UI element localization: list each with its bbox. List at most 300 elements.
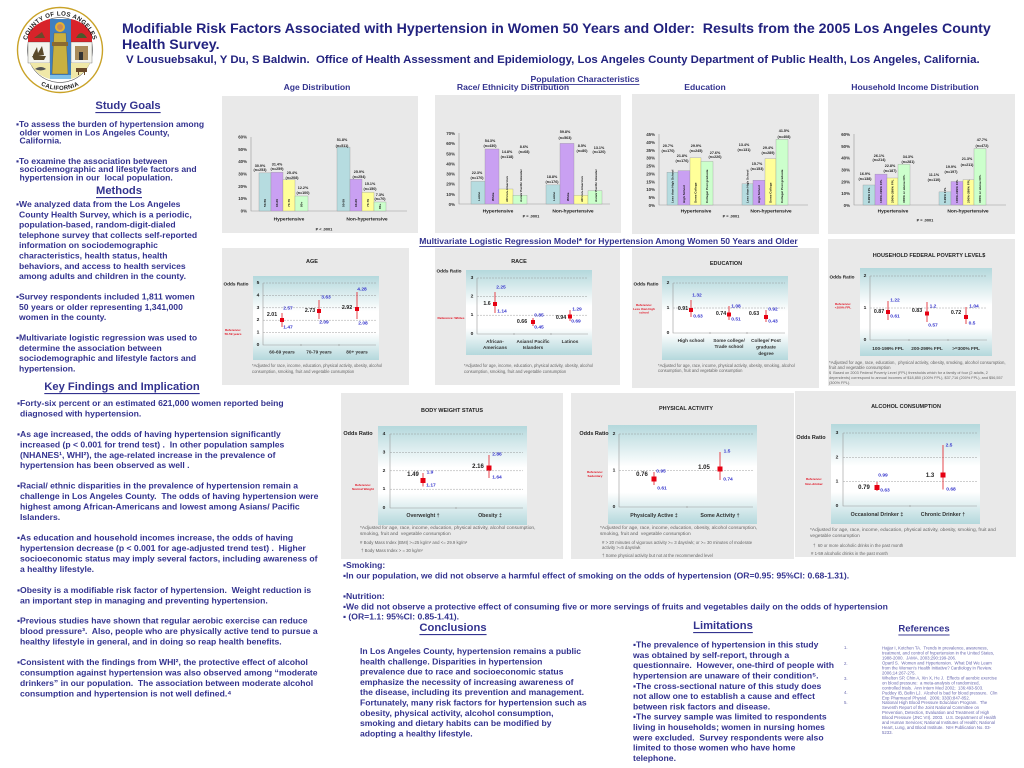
icon: county seal: CALIFORNIA	[42, 82, 79, 90]
panel: odds ratio by body weight: BODY WEIGHT STATUS	[421, 408, 483, 414]
panel: odds ratio by poverty level: Odds Ratio	[829, 274, 855, 280]
panel: education bar chart: (n=408)	[777, 135, 791, 139]
limitations text: limited to those women who have home	[633, 743, 796, 753]
panel: age distribution bar chart: 60-69	[275, 199, 279, 207]
key findings text: consumption against hypertension was also observed among “moderate	[20, 668, 318, 678]
panel: education bar chart: 27.6%	[710, 151, 721, 155]
references list: Seventh Report of the Joint National Committee on	[882, 705, 980, 710]
panel: odds ratio by education: 0.91	[678, 306, 688, 312]
panel: odds ratio by race: Odds Ratio	[436, 268, 462, 274]
panel: education bar chart: College/ Post graduate	[780, 169, 784, 203]
panel: education bar chart: (n=245)	[689, 149, 703, 153]
panel: odds ratio by body weight: Odds Ratio	[343, 431, 373, 437]
panel: education bar chart: 41.5%	[779, 129, 790, 133]
conclusions text: obesity, physical activity, alcohol consumption,	[360, 708, 554, 718]
heading: income distribution: Household Income Distribution	[851, 82, 979, 92]
panel: odds ratio by physical activity: Some Activity †	[700, 513, 740, 519]
panel: odds ratio by poverty level: Reference:	[835, 302, 851, 306]
panel: odds ratio by education: degree	[758, 350, 774, 356]
panel: odds ratio by alcohol consumption: 0.63	[880, 488, 890, 494]
panel: odds ratio by body weight: Reference:	[355, 483, 371, 487]
panel: education bar chart: 40%	[646, 139, 655, 144]
panel: age distribution bar chart: 70-79	[366, 199, 370, 207]
panel: education bar chart: 15.7%	[752, 162, 763, 166]
panel: odds ratio by age: 0	[257, 342, 260, 348]
panel: odds ratio by race	[435, 248, 620, 385]
panel: race distribution bar chart: Latino	[552, 192, 556, 201]
panel: odds ratio by physical activity: PHYSICAL ACTIVITY	[659, 406, 713, 412]
panel: race distribution bar chart: African-American	[580, 176, 584, 202]
panel: odds ratio by race: 0.85	[534, 312, 544, 318]
panel: odds ratio by alcohol consumption: ALCOHOL CONSUMPTION	[871, 404, 941, 410]
panel: odds ratio by body weight: 4	[383, 430, 386, 436]
references list: Prevention, Detection, Evaluation and Treatment of High	[882, 710, 990, 714]
references list: Hajjar I, Kotchen TA. Trends in prevalence, awareness,	[882, 645, 988, 650]
panel: odds ratio by poverty level: dependents) correspond to annual incomes of $18,850 (100% FPL), $37,716 (200% FPL), and $56,557	[829, 376, 1003, 380]
panel: odds ratio by race: 1.14	[497, 308, 507, 314]
panel: odds ratio by age: consumption, smoking, fruit and vegetable consumption	[252, 368, 355, 374]
panel: odds ratio by alcohol consumption: 1	[836, 478, 839, 484]
panel: odds ratio by poverty level: 200-299% FPL	[911, 346, 943, 350]
panel: education bar chart: 15%	[646, 179, 655, 184]
panel: odds ratio by poverty level: 0.87	[874, 309, 884, 315]
key findings text: ▪Forty-six percent or an estimated 621,000 women reported being	[17, 398, 284, 408]
key findings text: ▪Obesity is a modifiable risk factor of hypertension. Weight reduction is	[17, 585, 311, 595]
panel: education bar chart: Hypertensive	[681, 208, 712, 214]
panel: age distribution bar chart: P < .0001	[316, 226, 333, 232]
panel: household income bar chart: (n=110)	[928, 178, 941, 182]
panel: odds ratio by physical activity: 0.74	[723, 476, 733, 482]
references list: and Human Services; National Institutes of Health; National	[882, 720, 995, 724]
key findings text: increased (p < 0.001 for trend test) . In other population samples	[20, 440, 285, 450]
panel: odds ratio by body weight: 1	[383, 486, 386, 492]
references list: 2.	[844, 660, 848, 666]
panel: race distribution bar chart	[435, 95, 621, 233]
panel: race distribution bar chart: 50%	[446, 151, 455, 156]
panel: odds ratio by age: 1.47	[283, 324, 293, 330]
methods text: telephone survey that collects self-reported	[19, 230, 197, 240]
panel: odds ratio by education: Less than high	[633, 307, 655, 311]
panel: age distribution bar chart: (n=208)	[285, 176, 299, 180]
panel: age distribution bar chart: 30%	[238, 172, 247, 176]
methods text: behaviors, and access to health services	[19, 261, 186, 271]
panel: race distribution bar chart: 54.3%	[485, 139, 496, 143]
panel: household income bar chart: 50%	[841, 143, 850, 148]
panel: odds ratio by body weight: Obesity ‡	[478, 513, 502, 519]
study goals text: ▪To assess the burden of hypertension among	[16, 119, 204, 129]
panel: odds ratio by education: High school	[678, 338, 704, 342]
panel: odds ratio by physical activity: 0.95	[656, 468, 666, 474]
panel: race distribution bar chart: 8.5%	[578, 144, 587, 148]
panel: education bar chart: 45%	[646, 132, 655, 136]
panel: odds ratio by education: 0.43	[768, 318, 778, 324]
panel: odds ratio by age: 2.57	[283, 306, 293, 312]
panel: race distribution bar chart: 22.3%	[472, 171, 483, 175]
panel: odds ratio by body weight: 1.9	[427, 470, 434, 476]
panel: race distribution bar chart: (n=68)	[519, 150, 530, 154]
limitations text: not allow one to establish a cause and effect	[633, 691, 815, 701]
panel: age distribution bar chart: 51.8%	[337, 138, 348, 142]
key findings text: a healthy lifestyle.	[20, 564, 94, 574]
panel: odds ratio by education: graduate	[756, 344, 776, 349]
panel: odds ratio by poverty level: fruit and vegetable consumption	[829, 364, 891, 370]
panel: odds ratio by education: 0.63	[749, 311, 759, 317]
panel: odds ratio by alcohol consumption: 1.3	[926, 473, 935, 479]
limitations text: ▪The survey sample was limited to respondents	[633, 712, 827, 722]
panel: odds ratio by body weight: 3	[383, 449, 386, 455]
panel: odds ratio by physical activity: 0.61	[657, 486, 667, 492]
panel: age distribution bar chart: 25.4%	[287, 171, 298, 175]
panel: odds ratio by age: *Adjusted for race, income, education, physical activity, obesity, alcohol	[252, 362, 382, 368]
limitations text: ▪The prevalence of hypertension in this study	[633, 640, 819, 650]
key findings text: hypertension decrease (p < 0.001 for age-adjusted trend test) . Higher	[20, 543, 306, 553]
panel: age distribution bar chart	[222, 96, 418, 233]
references list: National High Blood Pressure Education Program. The	[882, 700, 988, 705]
panel: odds ratio by body weight: 2.86	[492, 452, 502, 458]
panel: race distribution bar chart: 59.8%	[560, 130, 571, 134]
panel: household income bar chart: 20%	[841, 179, 850, 184]
panel: race distribution bar chart: (n=563)	[558, 136, 572, 140]
panel: odds ratio by poverty level	[828, 239, 1015, 386]
limitations text: were excluded. Survey respondents were also	[632, 732, 824, 742]
limitations text: ▪The cross-sectional nature of this study does	[633, 681, 822, 691]
panel: age distribution bar chart: (n=511)	[336, 144, 349, 148]
panel: odds ratio by body weight: † Body Mass Index > = 30 kg/m²	[361, 548, 423, 552]
study goals text: ▪To examine the association between	[16, 156, 167, 166]
references list: 1.	[844, 644, 848, 650]
heading: conclusions: Conclusions	[419, 622, 487, 634]
panel: odds ratio by alcohol consumption: 2	[836, 454, 839, 460]
panel: odds ratio by race: *Adjusted for age, income, education, physical activity, obesity, alcohol	[464, 362, 593, 368]
panel: odds ratio by physical activity: smoking, fruit and vegetable consumption	[600, 530, 691, 536]
heading: population characteristics: Population Characteristics	[531, 74, 640, 84]
panel: odds ratio by age: 80+ years	[346, 350, 368, 354]
panel: household income bar chart: 300% or above FPL	[978, 175, 982, 203]
panel: odds ratio by education: 0	[667, 330, 670, 336]
methods text: hypertension.	[19, 363, 75, 373]
panel: odds ratio by education: school	[639, 310, 649, 314]
panel: odds ratio by race: Latinos	[562, 338, 579, 344]
references list: Whelton SP, Chin A, Xin X, He J. Effects of aerobic exercise	[882, 675, 998, 680]
panel: odds ratio by physical activity: Reference:	[587, 470, 603, 474]
study goals text: sociodemographic and lifestyle factors and	[20, 164, 197, 174]
panel: odds ratio by race: 0	[471, 330, 474, 336]
panel: odds ratio by physical activity: 0	[613, 504, 616, 510]
panel: age distribution bar chart: (n=254)	[352, 175, 366, 179]
panel: odds ratio by body weight: 1.49	[407, 472, 419, 478]
panel: odds ratio by body weight: *Adjusted for age, race, income, education, physical activity, alcohol consumption,	[360, 524, 535, 530]
panel: odds ratio by race: 1.6	[483, 301, 491, 307]
panel: age distribution bar chart: 0%	[241, 208, 247, 214]
panel: odds ratio by race: 2.25	[496, 284, 506, 290]
key findings text: ▪Previous studies have shown that regular aerobic exercise can reduce	[17, 616, 308, 626]
key findings text	[17, 398, 319, 698]
panel: education bar chart	[632, 94, 819, 234]
panel: odds ratio by race: Reference: Whites	[438, 316, 465, 320]
panel: race distribution bar chart: 70%	[446, 130, 455, 136]
panel: education bar chart: Some College	[694, 182, 698, 203]
panel: age distribution bar chart: 10%	[238, 196, 247, 201]
panel: odds ratio by physical activity: 2	[613, 430, 616, 436]
panel: education bar chart: College/ Post graduate	[705, 169, 709, 203]
panel: age distribution bar chart: 25.9%	[354, 170, 365, 174]
title: Health Survey.	[122, 37, 220, 53]
conclusions text: In Los Angeles County, hypertension remains a public	[360, 646, 581, 656]
panel: odds ratio by education: 1.32	[692, 292, 702, 298]
panel: race distribution bar chart: (n=120)	[592, 150, 606, 154]
references list: from the Women's Health Initiative? Cardiology in Review.	[882, 665, 992, 670]
panel: odds ratio by alcohol consumption: 0.99	[878, 472, 888, 478]
methods text: ▪We analyzed data from the Los Angeles	[16, 199, 181, 209]
panel: household income bar chart: 0-99% FPL	[943, 187, 947, 203]
heading: study goals: Study Goals	[95, 100, 161, 112]
heading: multivariate regression: Multivariate Logistic Regression Model* for Hypertension Among Women 50 Years and Older	[419, 236, 798, 246]
panel: race distribution bar chart: 60%	[446, 141, 455, 146]
key findings text: hypertension has been observed as well .	[20, 460, 190, 470]
panel: odds ratio by race: Americans	[483, 344, 507, 350]
key findings text: ▪As age increased, the odds of having hypertension significantly	[17, 429, 281, 439]
key findings text: blood pressure³. Also, people who are physically active tend to pursue a	[20, 626, 318, 636]
panel: household income bar chart: (n=214)	[872, 158, 886, 162]
heading: methods: Methods	[96, 185, 142, 197]
panel: odds ratio by race: Islanders	[523, 344, 544, 350]
key findings text: an important step in managing and preventing hypertension.	[20, 596, 268, 606]
heading: key findings: Key Findings and Implication	[44, 381, 200, 393]
panel: odds ratio by race: 0.45	[534, 324, 544, 330]
panel: age distribution bar chart: 60-69	[354, 199, 358, 207]
limitations text: living in households; women in nursing homes	[633, 722, 825, 732]
panel: household income bar chart: (n=472)	[975, 144, 989, 148]
panel: odds ratio by education: 1	[667, 304, 670, 310]
panel: race distribution bar chart: White	[566, 192, 570, 201]
smoking and nutrition text: ▪Nutrition:	[343, 591, 385, 601]
panel: race distribution bar chart: 13.1%	[594, 146, 605, 150]
panel: race distribution bar chart: (n=430)	[483, 144, 497, 148]
panel: race distribution bar chart: 0%	[449, 202, 455, 206]
panel: odds ratio by poverty level: 0.83	[912, 308, 922, 314]
panel: education bar chart: High School	[682, 185, 686, 203]
panel: household income bar chart: 21.3%	[962, 157, 973, 161]
panel: education bar chart: (n=289)	[761, 151, 775, 155]
panel: household income bar chart: (n=138)	[858, 177, 872, 181]
key findings text: socioeconomic status may imply several factors, including awareness of	[20, 554, 318, 564]
study goals text: hypertension in our local population.	[20, 172, 173, 182]
panel: household income bar chart: 22.8%	[885, 164, 896, 168]
methods text	[16, 199, 197, 373]
panel: odds ratio by physical activity: *Adjusted for age, race, income, education, obesity, alcohol consumption,	[600, 524, 757, 530]
key findings text: (NHANES¹, WHI²), the age-related increase in the prevalence of	[20, 450, 276, 460]
left column	[16, 100, 319, 698]
panel: odds ratio by alcohol consumption: 0.79	[858, 485, 870, 491]
panel: odds ratio by education: 2	[667, 280, 670, 286]
panel: odds ratio by body weight: 2	[383, 467, 386, 473]
panel: race distribution bar chart: 14.8%	[502, 150, 513, 154]
key findings text: diagnosed with hypertension.	[20, 408, 141, 418]
panel: odds ratio by alcohol consumption: 3	[836, 430, 839, 436]
methods text: population-based, random-digit-dialed	[19, 220, 176, 230]
panel: odds ratio by race: 2	[471, 293, 474, 299]
panel: odds ratio by education: Trade school	[715, 344, 743, 348]
panel: race distribution bar chart: 20%	[446, 181, 455, 186]
panel: odds ratio by poverty level: 0.72	[951, 310, 961, 316]
panel: household income bar chart: 11.1%	[929, 173, 940, 177]
panel: odds ratio by age: 1	[257, 329, 260, 335]
panel: odds ratio by physical activity: Odds Ratio	[579, 431, 609, 437]
panel: race distribution bar chart: Asian/ Pacific Islander	[519, 168, 523, 202]
panel: odds ratio by race: African-	[486, 338, 504, 344]
panel: odds ratio by alcohol consumption: 0.68	[946, 486, 956, 492]
panel: odds ratio by education: *Adjusted for age, race, income, physical activity, obesity, smoking, alcohol	[658, 362, 795, 368]
panel: odds ratio by race: consumption, smoking, fruit and vegetable consumption	[464, 368, 567, 374]
panel: odds ratio by age: 5	[257, 280, 260, 286]
panel: age distribution bar chart: 7.3%	[376, 193, 385, 197]
panel: education bar chart: (n=153)	[750, 167, 764, 171]
panel: odds ratio by education: 0.92	[768, 306, 778, 312]
panel: odds ratio by poverty level: >=300% FPL	[952, 346, 980, 350]
panel: age distribution bar chart: 15.1%	[365, 182, 376, 186]
panel: age distribution bar chart: (n=70)	[375, 197, 386, 201]
limitations text: telephone.	[633, 753, 676, 763]
panel: odds ratio by education: EDUCATION	[710, 261, 742, 267]
panel: odds ratio by alcohol consumption: 0	[836, 502, 839, 508]
panel: age distribution bar chart: 20%	[238, 184, 247, 189]
smoking and nutrition text	[343, 560, 888, 622]
study goals text: California.	[20, 136, 62, 146]
methods text: sociodemographic and lifestyle factors and	[19, 353, 196, 363]
panel: odds ratio by physical activity: Physically Active ‡	[630, 513, 678, 519]
references list: 5.	[844, 700, 848, 704]
heading: race distribution: Race/ Ethnicity Distribution	[457, 82, 569, 92]
panel: odds ratio by poverty level: 2	[864, 272, 867, 278]
title: Modifiable Risk Factors Associated with Hypertension in Women 50 Years and Older: Results from the 2005 Los Angeles County	[122, 21, 991, 37]
key findings text: drinkers” in our population. The association between moderate alcohol	[20, 678, 313, 688]
panel: age distribution bar chart: 80+	[378, 204, 382, 209]
panel: odds ratio by education: consumption, fruit and vegetable consumption	[658, 368, 743, 372]
panel: household income bar chart: P = .0001	[917, 218, 934, 222]
heading: education: Education	[684, 82, 726, 92]
panel: odds ratio by alcohol consumption: vegetable consumption	[810, 532, 860, 538]
panel: race distribution bar chart: 8.6%	[520, 145, 529, 149]
panel: race distribution bar chart: White	[491, 192, 495, 201]
panel: household income bar chart: Non-hypertensive	[947, 208, 989, 214]
conclusions text: prevalence due to race and socioeconomic status	[360, 667, 564, 677]
panel: household income bar chart	[828, 94, 1015, 234]
methods text: ▪Survey respondents included 1,811 women	[16, 292, 195, 302]
panel: odds ratio by poverty level: <100% FPL	[835, 306, 851, 310]
smoking and nutrition text: ▪Smoking:	[343, 560, 385, 570]
icon: county seal: COUNTY OF LOS ANGELES	[23, 11, 97, 40]
panel: odds ratio by body weight: 1.17	[426, 482, 436, 488]
conclusions text: adopting a healthy lifestyle.	[360, 728, 473, 738]
panel: odds ratio by body weight: 1.64	[492, 474, 502, 480]
panel: odds ratio by education: 0.63	[693, 314, 703, 320]
panel: age distribution bar chart: (n=259)	[270, 167, 284, 171]
panel: age distribution bar chart: (n=150)	[363, 187, 377, 191]
key findings text: healthy lifestyle in general, and in doing so reap health benefits.	[20, 636, 282, 646]
references list: Opartl S. Women and Hypertension. What Did We Learn	[882, 660, 993, 665]
conclusions text: Fortunately, many risk factors for hypertension such as	[360, 698, 587, 708]
panel: odds ratio by age	[222, 248, 409, 385]
smoking and nutrition text: ▪We did not observe a protective effect of consuming five or more servings of fruits and vegetables daily on the odds of hypertension	[343, 602, 888, 612]
panel: age distribution bar chart: (n=253)	[253, 168, 267, 172]
references list: Heart, Lung, and Blood Institute. NIH Publication No. 03-	[882, 724, 991, 730]
methods text: women in the county.	[18, 312, 106, 322]
panel: odds ratio by physical activity: 0.76	[636, 472, 648, 478]
panel: odds ratio by age: 70-79 years	[306, 350, 332, 354]
panel: odds ratio by age: 2.92	[342, 305, 352, 311]
panel: race distribution bar chart: Non-hypertensive	[552, 208, 594, 214]
panel: education bar chart: 21.8%	[677, 154, 688, 158]
panel: odds ratio by poverty level: 1.2	[930, 304, 937, 310]
panel: odds ratio by age: AGE	[306, 259, 318, 265]
references list: Puddey IB, Beilin LJ. Alcohol is bad for blood pressure. Clin	[882, 690, 998, 695]
panel: household income bar chart: 26.1%	[874, 154, 885, 158]
panel: race distribution bar chart: (n=170)	[470, 176, 484, 180]
panel: education bar chart: Non-hypertensive	[750, 208, 792, 214]
panel: odds ratio by alcohol consumption: Chronic Drinker †	[921, 512, 965, 518]
panel: household income bar chart: (n=281)	[901, 160, 915, 164]
panel: race distribution bar chart: P = .0001	[523, 214, 540, 218]
key findings text: ▪Racial/ ethnic disparities in the prevalence of hypertension remain a	[17, 480, 298, 490]
panel: household income bar chart: 16.9%	[860, 172, 871, 176]
references list: 5233.	[882, 730, 893, 734]
panel: odds ratio by poverty level: 1.22	[890, 298, 900, 304]
panel: odds ratio by race: 0.94	[556, 315, 566, 321]
methods text: County Health Survey, which is a periodic,	[19, 209, 192, 219]
smoking and nutrition text: ▪ (OR=1.1: 95%CI: 0.85-1.41).	[343, 612, 459, 622]
key findings text: challenge in Los Angeles County. The odds of having hypertension were	[20, 491, 319, 501]
panel: odds ratio by age: 3.63	[321, 294, 331, 300]
panel: education bar chart: P = .0001	[723, 214, 740, 218]
panel: education bar chart: Less than High School	[670, 170, 674, 203]
panel: household income bar chart: (n=197)	[944, 170, 958, 174]
panel: odds ratio by age: 4	[257, 292, 260, 298]
panel: odds ratio by education: Some college/	[713, 338, 745, 342]
references list: treatment, and control of hypertension in the United States,	[882, 650, 994, 655]
panel: education bar chart: 25%	[646, 163, 655, 168]
panel: odds ratio by race: Asians/ Pacific	[516, 338, 550, 344]
panel: odds ratio by age: 2	[257, 317, 260, 323]
limitations text: was obtained by self-report, through a	[632, 650, 789, 660]
panel: odds ratio by age: 2.01	[267, 312, 277, 318]
panel: odds ratio by alcohol consumption: Odds Ratio	[796, 435, 826, 441]
panel: odds ratio by age: 2.08	[358, 320, 368, 326]
panel: education bar chart: (n=170)	[661, 149, 675, 153]
panel: household income bar chart: 300% or above FPL	[902, 175, 906, 203]
panel: household income bar chart: Hypertensive	[878, 208, 909, 214]
panel: race distribution bar chart: Asian/ Pacific Islander	[594, 168, 598, 202]
panel: odds ratio by age: 50-59 years	[225, 332, 242, 336]
panel: odds ratio by poverty level: HOUSEHOLD FEDERAL POVERTY LEVEL$	[873, 253, 985, 259]
panel: age distribution bar chart: 80+	[300, 202, 304, 207]
panel: odds ratio by physical activity: activity >=5 days/wk	[602, 544, 641, 550]
panel: odds ratio by race: 3	[471, 274, 474, 280]
panel: education bar chart: High School	[757, 185, 761, 203]
panel: odds ratio by physical activity: # > 20 minutes of vigorous activity >= 3 days/wk; or >= 30 minutes of moderate	[602, 540, 753, 544]
panel: age distribution bar chart: 40%	[238, 159, 247, 164]
methods text: ▪Multivariate logistic regression was used to	[16, 332, 197, 342]
panel: odds ratio by alcohol consumption: Occasional Drinker ‡	[851, 512, 903, 518]
panel: age distribution bar chart: 30.9%	[255, 164, 266, 168]
panel: age distribution bar chart: 70-79	[287, 199, 291, 207]
panel: race distribution bar chart: 40%	[446, 161, 455, 166]
references list: on blood pressure: a meta-analysis of randomized,	[882, 680, 980, 685]
panel: age distribution bar chart: 50-59	[342, 199, 346, 207]
study goals text	[16, 119, 204, 182]
panel: odds ratio by poverty level: 1	[864, 304, 867, 310]
panel: household income bar chart: (n=211)	[961, 163, 974, 167]
panel: household income bar chart: 40%	[841, 155, 850, 160]
